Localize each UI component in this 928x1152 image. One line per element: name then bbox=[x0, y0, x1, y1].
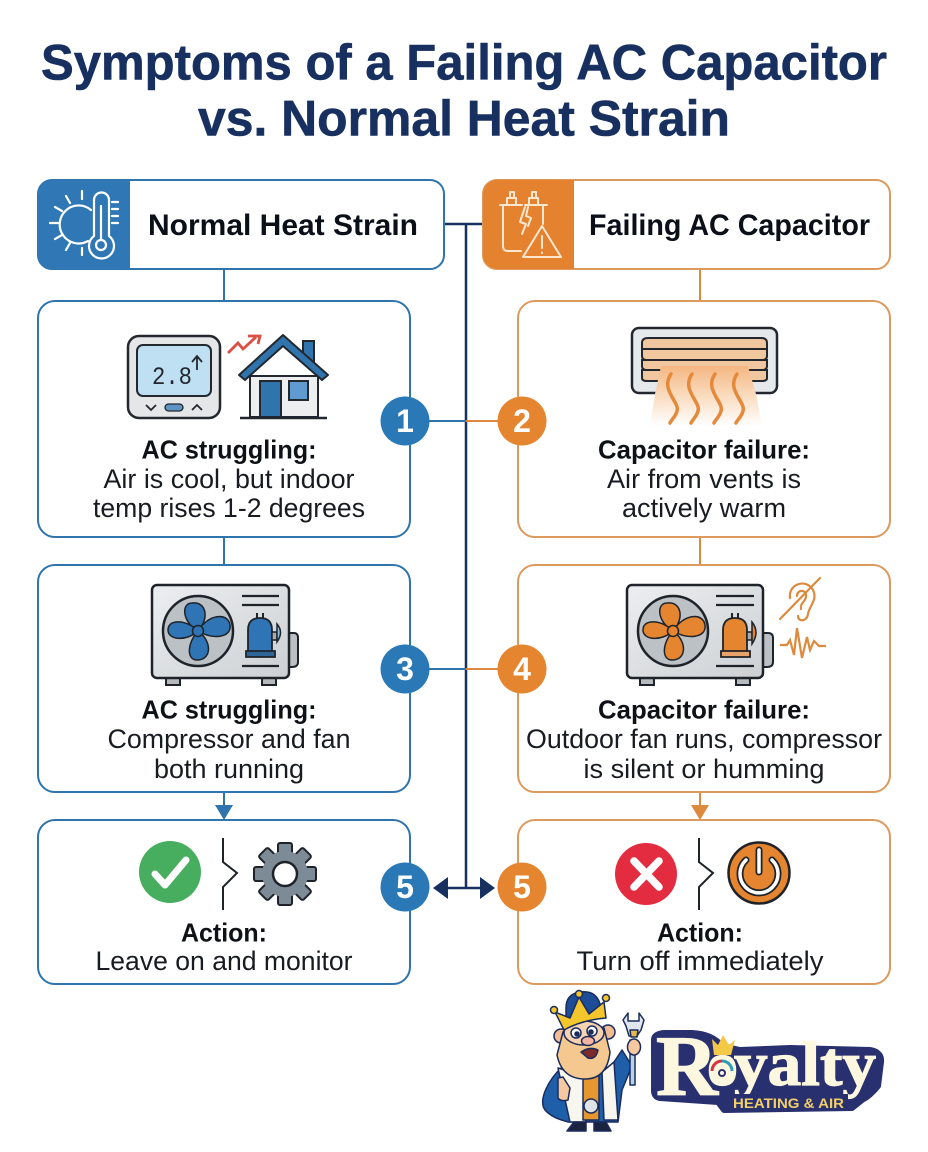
badge 3: 3 bbox=[396, 651, 414, 687]
badge 5 left bbox=[380, 862, 430, 912]
divider chevron bbox=[223, 838, 237, 910]
logo wordmark bbox=[654, 1018, 881, 1114]
panel: action, heat strain bbox=[38, 820, 410, 984]
logo wordmark: yalty bbox=[734, 1031, 876, 1099]
badge 5 right: 5 bbox=[513, 869, 531, 905]
badge 2: 2 bbox=[513, 403, 531, 439]
badge 5 right bbox=[498, 862, 546, 912]
thumbs up bbox=[558, 1077, 570, 1101]
text block: actively warm bbox=[622, 493, 786, 523]
text block: Capacitor failure: bbox=[598, 434, 810, 464]
panel: air temperature, capacitor bbox=[518, 301, 890, 537]
icon: house bbox=[239, 335, 328, 418]
icon: gear bbox=[254, 843, 316, 905]
badge 2 bbox=[498, 396, 546, 446]
badge 4 bbox=[498, 644, 546, 694]
text block: Leave on and monitor bbox=[96, 946, 353, 976]
icon: green check bbox=[139, 841, 201, 903]
text block: AC struggling: bbox=[142, 694, 316, 724]
heading: Normal Heat Strain bbox=[148, 209, 418, 242]
central connector bbox=[433, 224, 495, 899]
badge 4: 4 bbox=[513, 651, 531, 687]
icon: broken capacitor with warning bbox=[500, 192, 561, 257]
logo wordmark: HEATING & AIR bbox=[733, 1095, 844, 1111]
badge 1 bbox=[380, 396, 430, 446]
icon: sun and thermometer bbox=[50, 191, 118, 258]
logo wordmark: R bbox=[656, 1018, 719, 1114]
head and beard bbox=[554, 1029, 568, 1043]
icon: red x bbox=[615, 843, 677, 905]
text block: Turn off immediately bbox=[576, 946, 824, 976]
text block: Compressor and fan bbox=[108, 724, 350, 754]
badge 5 left: 5 bbox=[396, 869, 414, 905]
text block: Air is cool, but indoor bbox=[104, 464, 355, 494]
logo wordmark: o bbox=[707, 1031, 738, 1099]
badge 1: 1 bbox=[396, 403, 414, 439]
header: failing capacitor bbox=[483, 180, 890, 269]
text block bbox=[108, 694, 350, 784]
text block: Action: bbox=[657, 918, 743, 948]
panel: compressor, heat strain bbox=[38, 565, 410, 792]
icon: crossed-out ear bbox=[780, 578, 820, 620]
icon: thermostat: 2.8 bbox=[152, 363, 192, 392]
right column connectors bbox=[466, 269, 709, 820]
icon: vent with heat bbox=[632, 328, 777, 426]
header: normal heat strain bbox=[38, 180, 444, 269]
text block: both running bbox=[154, 754, 304, 784]
logo mascot bbox=[543, 990, 644, 1131]
text block: Air from vents is bbox=[607, 464, 801, 494]
icon: power button bbox=[728, 842, 790, 904]
text block: Capacitor failure: bbox=[598, 694, 810, 724]
crown bbox=[566, 992, 602, 1022]
divider chevron bbox=[699, 838, 713, 910]
panel: compressor, capacitor bbox=[518, 565, 890, 792]
text block bbox=[598, 434, 810, 523]
text block bbox=[526, 694, 882, 784]
left column connectors bbox=[215, 269, 466, 820]
text block: AC struggling: bbox=[142, 434, 316, 464]
robe bbox=[543, 1050, 632, 1122]
icon: sound wave bbox=[780, 628, 826, 658]
text block: is silent or humming bbox=[584, 754, 824, 784]
text block bbox=[576, 918, 824, 976]
text block: temp rises 1-2 degrees bbox=[93, 493, 365, 523]
panel: air temperature, heat strain bbox=[38, 301, 410, 537]
title: Symptoms of a Failing AC Capacitor bbox=[41, 34, 887, 90]
icon: rising red arrow bbox=[228, 336, 260, 353]
text block bbox=[96, 918, 353, 976]
title: vs. Normal Heat Strain bbox=[198, 90, 730, 146]
icon: thermostat bbox=[128, 336, 220, 418]
text block: Action: bbox=[181, 918, 267, 948]
text block: Outdoor fan runs, compressor bbox=[526, 724, 882, 754]
wrench and hand bbox=[630, 1040, 635, 1085]
badge 3 bbox=[380, 644, 430, 694]
icon: outdoor unit blue bbox=[152, 585, 298, 685]
title bbox=[41, 34, 887, 146]
text block bbox=[93, 434, 365, 523]
heading: Failing AC Capacitor bbox=[589, 209, 870, 242]
panel: action, capacitor bbox=[518, 820, 890, 984]
icon: outdoor unit orange bbox=[627, 585, 773, 685]
